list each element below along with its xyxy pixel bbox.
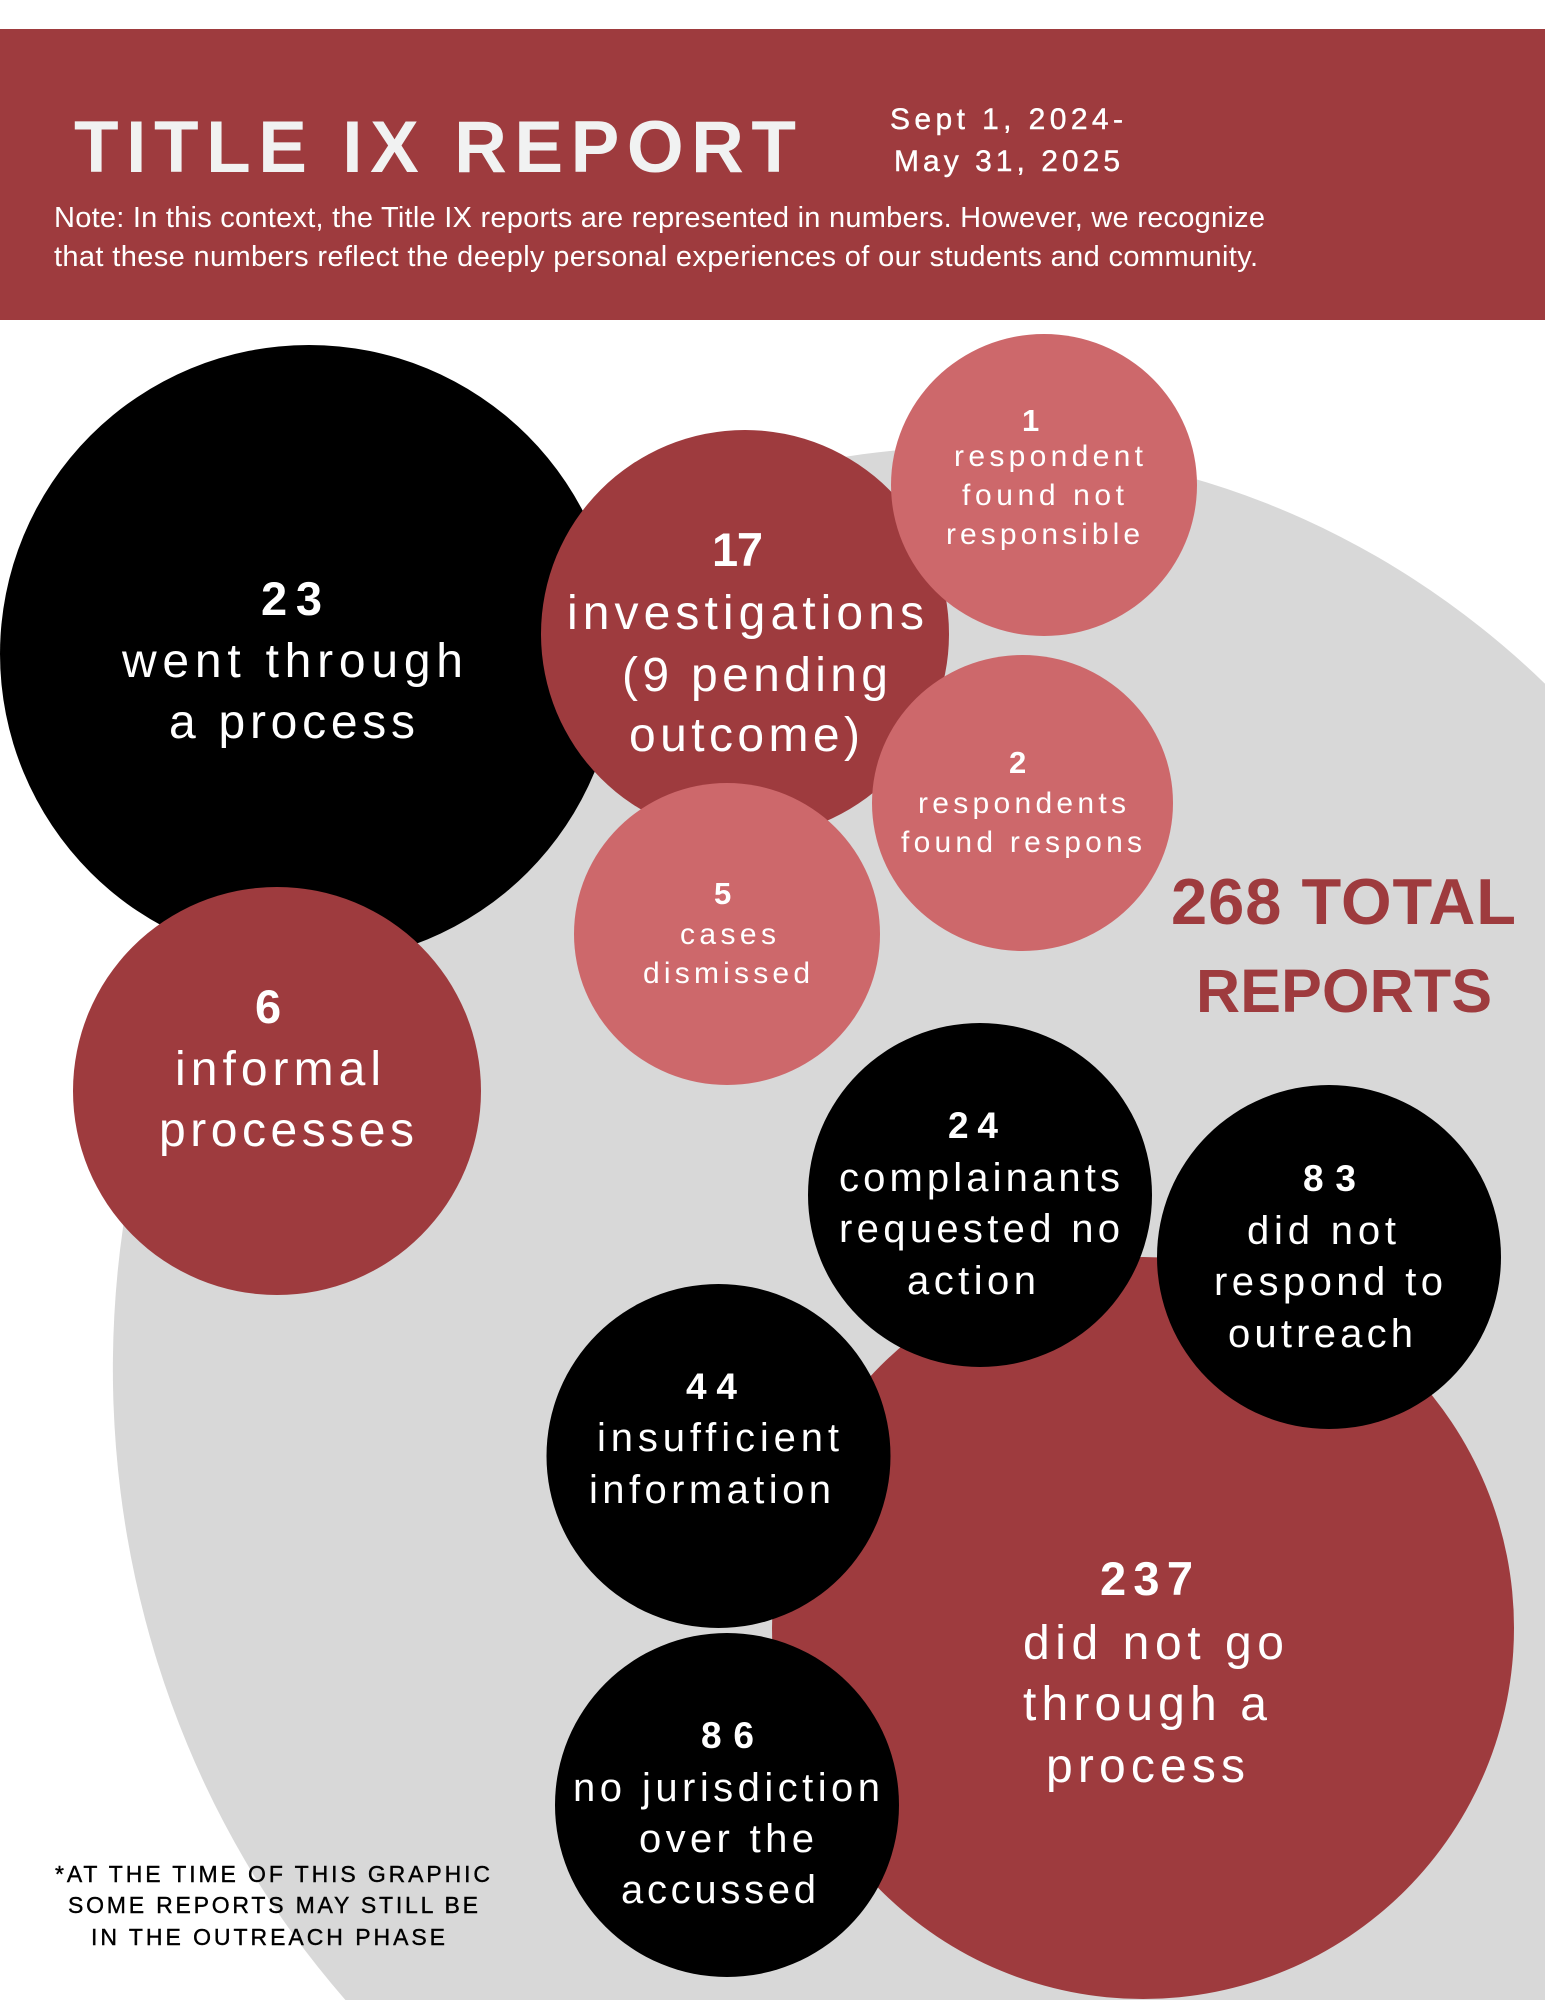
circle: 2 respondents found responsible	[872, 655, 1173, 951]
circle: 2 respondents found responsible: found respons	[901, 826, 1142, 859]
header note	[54, 202, 1265, 273]
date range	[890, 103, 1123, 178]
circle: 5 cases dismissed: 5	[714, 876, 731, 911]
circle: 44 insufficient information: insufficient	[597, 1416, 839, 1460]
circle: 23 went through a process	[0, 345, 618, 963]
circle: 1 respondent found not responsible: responsible	[946, 518, 1140, 551]
circle: 237 did not go through a process	[772, 1257, 1514, 1999]
circle: 2 respondents found responsible: 2	[1009, 745, 1026, 780]
circle: 2 respondents found responsible: respondents	[918, 787, 1126, 820]
circle: 24 complainants requested no action: requested no	[839, 1207, 1120, 1251]
header banner	[0, 29, 1545, 320]
circle: 6 informal processes: 6	[255, 980, 281, 1033]
circle: 17 investigations	[541, 430, 949, 838]
circle: 6 informal processes	[73, 887, 481, 1295]
circle: 24 complainants requested no action: action	[907, 1259, 1036, 1303]
circle: 23 went through a process: went through	[121, 635, 463, 688]
circle: 44 insufficient information: 44	[686, 1366, 737, 1407]
circle: 6 informal processes: informal	[175, 1043, 381, 1096]
circle: 1 respondent found not responsible: respondent	[954, 440, 1144, 473]
circle: 24 complainants requested no action	[808, 1023, 1152, 1367]
circle: 86 no jurisdiction over the accussed	[555, 1633, 899, 1977]
circle: 17 investigations: (9 pending	[622, 649, 888, 702]
circle: 83 did not respond to outreach	[1157, 1085, 1501, 1429]
circle: 237 did not go through a process: 237	[1100, 1552, 1193, 1605]
circle: 17 investigations: 17	[712, 523, 763, 576]
total reports heading	[1171, 865, 1516, 1025]
circle: 17 investigations: investigations	[567, 587, 924, 640]
circle: 24 complainants requested no action: 24	[948, 1105, 998, 1146]
circle: 23 went through a process: 23	[261, 572, 322, 625]
title: TITLE IX REPORT	[74, 107, 796, 188]
circle: 5 cases dismissed	[574, 783, 880, 1085]
circle: 23 went through a process: a process	[169, 696, 415, 749]
footnote	[55, 1861, 490, 1950]
header note: that these numbers reflect the deeply personal experiences of our students and community.	[54, 241, 1258, 273]
circle: 237 did not go through a process: did not go	[1023, 1617, 1284, 1670]
circle: 83 did not respond to outreach: 83	[1303, 1158, 1356, 1199]
date range: May 31, 2025	[894, 145, 1120, 178]
footnote: *AT THE TIME OF THIS GRAPHIC	[55, 1861, 490, 1887]
circle: 83 did not respond to outreach: did not	[1247, 1209, 1396, 1253]
circle: 86 no jurisdiction over the accussed: no jurisdiction	[573, 1766, 880, 1810]
circle: 86 no jurisdiction over the accussed: 86	[701, 1715, 754, 1756]
circle: 24 complainants requested no action: complainants	[839, 1156, 1120, 1200]
circle: 44 insufficient information: information	[589, 1468, 831, 1512]
circle: 83 did not respond to outreach: outreach	[1228, 1312, 1413, 1356]
circle: 1 respondent found not responsible: found not	[962, 479, 1125, 512]
date range: Sept 1, 2024-	[890, 103, 1123, 136]
total reports heading: REPORTS	[1196, 957, 1492, 1025]
circle: 86 no jurisdiction over the accussed: accussed	[621, 1868, 816, 1912]
circle: 237 did not go through a process: through a	[1023, 1678, 1267, 1731]
header note: Note: In this context, the Title IX reports are represented in numbers. However, we recognize	[54, 202, 1265, 234]
large grey background ellipse: 268 total reports	[113, 447, 1545, 2000]
circle: 44 insufficient information	[546, 1284, 890, 1628]
circle: 6 informal processes: processes	[159, 1104, 414, 1157]
circle: 5 cases dismissed: cases	[680, 918, 776, 951]
footnote: SOME REPORTS MAY STILL BE	[68, 1892, 478, 1918]
circle: 5 cases dismissed: dismissed	[643, 957, 810, 990]
total reports heading: 268 TOTAL	[1171, 865, 1516, 938]
circle: 17 investigations: outcome)	[629, 709, 860, 762]
circle: 1 respondent found not responsible	[891, 334, 1197, 636]
footnote: IN THE OUTREACH PHASE	[91, 1924, 445, 1950]
circle: 86 no jurisdiction over the accussed: over the	[639, 1817, 814, 1861]
circle: 1 respondent found not responsible: 1	[1022, 403, 1039, 438]
circle: 237 did not go through a process: process	[1046, 1740, 1245, 1793]
circle: 83 did not respond to outreach: respond to	[1214, 1260, 1443, 1304]
